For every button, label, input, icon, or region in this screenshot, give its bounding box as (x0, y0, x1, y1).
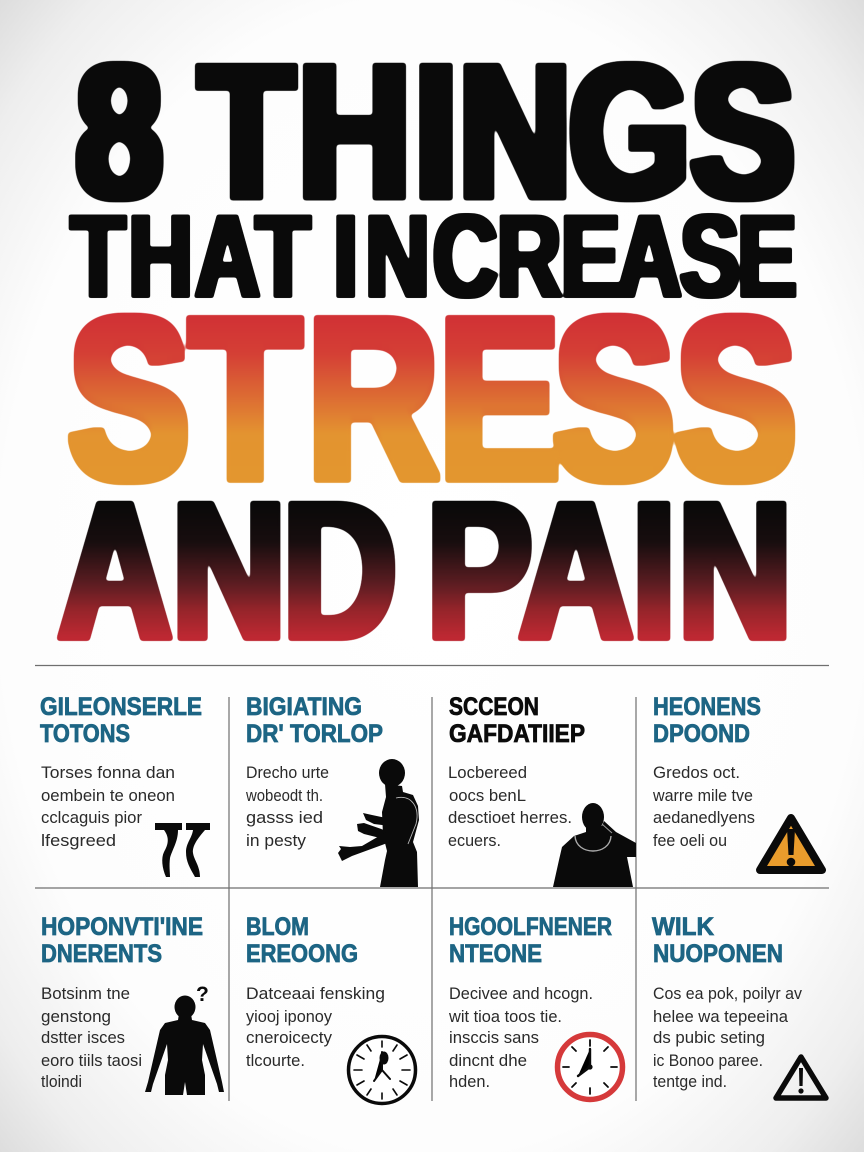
text block: item 7: wit tioa toos tie. (448, 1008, 562, 1026)
text block: item 7: dincnt dhe (449, 1052, 527, 1070)
title line: and pain: AND PAIN (58, 460, 792, 681)
text block: item 3: Locbereed (448, 764, 527, 782)
text block: item 8: helee wa tepeeina (653, 1008, 789, 1026)
heading: item 8: NUOPONEN (653, 940, 783, 968)
text block: item 8: Cos ea pok, poilyr av (653, 985, 803, 1003)
panel: item 8 (652, 913, 826, 1098)
text block: item 6: cneroicecty (246, 1029, 333, 1047)
heading: item 4: HEONENS (653, 693, 761, 721)
text block: item 1: cclcaguis pior (41, 809, 143, 827)
text block: item 1: Torses fonna dan (41, 764, 175, 782)
text block: item 3: ecuers. (448, 832, 501, 850)
panel: item 6 (246, 913, 416, 1104)
text block: item 6: Datceaai fensking (246, 985, 385, 1003)
text block: item 2: in pesty (246, 832, 307, 850)
heading: item 6: EREOONG (246, 940, 358, 968)
title (58, 25, 797, 681)
text block: item 8: tentge ind. (653, 1073, 727, 1091)
text block: item 2 (245, 764, 329, 850)
panel: item 1 (40, 693, 210, 877)
text block: item 7 (448, 985, 593, 1091)
heading: item 4: DPOOND (653, 720, 750, 748)
text block: item 3 (448, 764, 572, 850)
icon: person with question mark: ? (196, 983, 209, 1006)
text block: item 3: oocs benL (449, 787, 526, 805)
text block: item 5: dstter isces (41, 1029, 125, 1047)
heading: item 1: TOTONS (40, 720, 130, 748)
heading: item 8 (652, 913, 783, 968)
heading: item 5: HOPONVTI'INE (41, 913, 203, 941)
text block: item 4 (652, 764, 755, 850)
icon: person with question mark (145, 983, 224, 1095)
heading: item 2: BIGIATING (246, 693, 362, 721)
heading: item 8: WILK (652, 913, 714, 941)
text block: item 5: Botsinm tne (41, 985, 130, 1003)
panel: item 2 (245, 693, 419, 887)
text block: item 8: ic Bonoo paree. (653, 1052, 763, 1070)
icon: person holding arm (338, 759, 419, 887)
heading: item 1 (40, 693, 202, 748)
text block: item 3: desctioet herres. (448, 809, 572, 827)
panel: item 3 (448, 693, 636, 887)
heading: item 7 (449, 913, 612, 968)
text block: item 8 (653, 985, 803, 1091)
heading: item 3 (449, 693, 585, 748)
text block: item 8: ds pubic seting (653, 1029, 765, 1047)
text block: item 1 (41, 764, 175, 850)
heading: item 5: DNERENTS (41, 940, 162, 968)
text block: item 2: wobeodt th. (245, 787, 323, 805)
text block: item 7: hden. (449, 1073, 490, 1091)
panel: item 4 (652, 693, 822, 870)
text block: item 1: oembein te oneon (41, 787, 175, 805)
text block: item 5: genstong (41, 1008, 111, 1026)
heading: item 2 (246, 693, 383, 748)
icon: twisted muscles (155, 823, 210, 877)
heading: item 7: NTEONE (449, 940, 542, 968)
title line: 8 things: 8 THINGS (76, 25, 795, 237)
text block: item 7: insccis sans (449, 1029, 539, 1047)
panel: item 7 (448, 913, 622, 1100)
text block: item 4: fee oeli ou (653, 832, 727, 850)
icon: outlined warning triangle (776, 1057, 826, 1098)
text block: item 5 (41, 985, 142, 1091)
text block: item 6 (246, 985, 385, 1070)
heading: item 4 (653, 693, 761, 748)
text block: item 2: gasss ied (246, 809, 323, 827)
text block: item 7: Decivee and hcogn. (449, 985, 593, 1003)
text block: item 2: Drecho urte (246, 764, 329, 782)
heading: item 2: DR' TORLOP (246, 720, 383, 748)
heading: item 6 (246, 913, 358, 968)
icon: orange warning triangle (760, 818, 822, 870)
heading: item 3: SCCEON (449, 693, 539, 721)
heading: item 5 (41, 913, 203, 968)
heading: item 6: BLOM (246, 913, 309, 941)
heading: item 3: GAFDATIIEP (449, 720, 585, 748)
text block: item 5: eoro tiils taosi (41, 1052, 142, 1070)
icon: red clock (558, 1034, 622, 1100)
title line: stress: STRESS (68, 271, 797, 528)
title line: that increase: THAT INCREASE (71, 192, 797, 322)
heading: item 1: GILEONSERLE (40, 693, 202, 721)
text block: item 4: warre mile tve (652, 787, 753, 805)
text block: item 1: lfesgreed (41, 832, 116, 850)
panel: item 5 (41, 913, 224, 1095)
text block: item 6: yiooj iponoy (246, 1008, 333, 1026)
icon: black clock (348, 1036, 416, 1104)
text block: item 5: tloindi (41, 1073, 82, 1091)
text block: item 6: tlcourte. (246, 1052, 305, 1070)
text block: item 4: Gredos oct. (653, 764, 740, 782)
heading: item 7: HGOOLFNENER (449, 913, 612, 941)
text block: item 4: aedanedlyens (653, 809, 755, 827)
icon: person holding neck (553, 803, 636, 887)
